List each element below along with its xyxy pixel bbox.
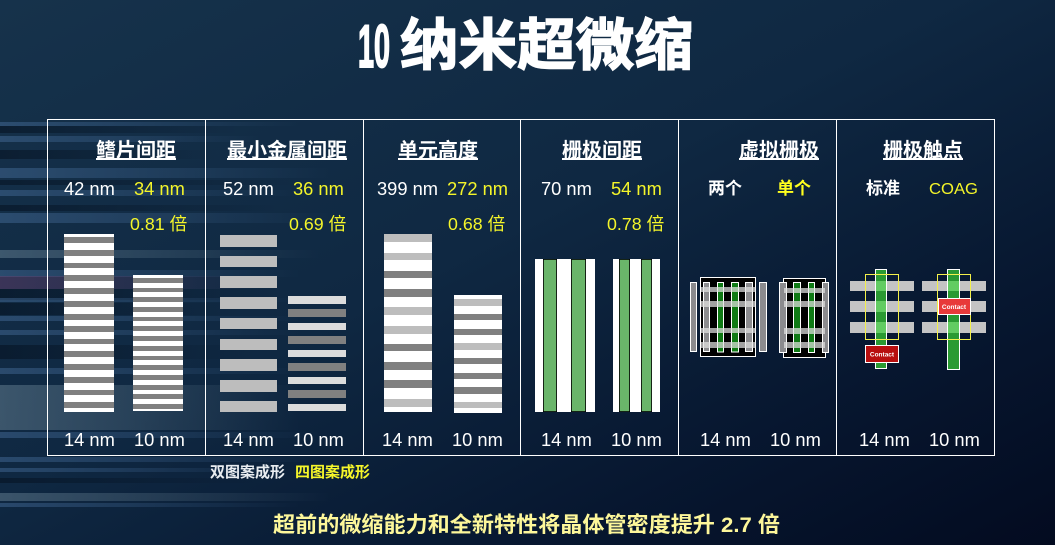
chart: 14 nm cell — [384, 234, 432, 412]
node labels: 10 nm — [452, 429, 503, 450]
heading: dummy gate: 虚拟栅极 — [739, 139, 819, 162]
values: cell height: 0.68 倍 — [448, 214, 506, 234]
node labels — [382, 429, 503, 450]
chart: 10 nm metal — [288, 296, 346, 411]
panel: gate pitch — [535, 139, 665, 450]
values: gate contact: 标准 — [866, 179, 900, 198]
node labels — [541, 429, 662, 450]
node labels: 14 nm — [382, 429, 433, 450]
chart: 14 nm contact — [850, 270, 914, 368]
panel: minimum metal pitch — [220, 138, 347, 450]
node labels: 10 nm — [770, 429, 821, 450]
heading: metal pitch: 最小金属间距 — [227, 138, 347, 162]
values: cell height: 272 nm — [447, 178, 508, 199]
values: dummy gate — [708, 179, 811, 198]
values: dummy gate: 单个 — [777, 179, 811, 198]
node labels: 10 nm — [293, 429, 344, 450]
panel: gate contact — [850, 139, 986, 450]
values: dummy gate: 两个 — [708, 179, 742, 198]
values: fin pitch: 34 nm — [134, 178, 185, 199]
panel: cell height — [377, 138, 508, 450]
node labels: 10 nm — [929, 429, 980, 450]
node labels — [223, 429, 344, 450]
values: cell height: 399 nm — [377, 178, 438, 199]
chart: 10 nm contact over active gate — [922, 270, 986, 370]
contact label: Contact — [870, 352, 895, 358]
values: cell height — [377, 178, 508, 234]
values: gate contact — [866, 179, 978, 198]
heading: cell height: 单元高度 — [398, 138, 478, 162]
node labels — [700, 429, 821, 450]
chart: 14 nm gates — [535, 259, 595, 412]
heading: gate pitch: 栅极间距 — [562, 139, 642, 162]
node labels: 10 nm — [611, 429, 662, 450]
chart: 14 nm metal — [220, 235, 277, 412]
heading: gate contact: 栅极触点 — [883, 139, 963, 162]
chart: 10 nm gates — [613, 259, 660, 412]
node labels — [64, 429, 185, 450]
values: gate contact: COAG — [929, 181, 978, 198]
values: gate pitch: 0.78 倍 — [607, 214, 665, 234]
values: gate pitch — [541, 178, 665, 234]
legend: patterning: 双图案成形 — [210, 463, 285, 481]
node labels — [859, 429, 980, 450]
values: fin pitch — [64, 178, 188, 234]
chart: 10 nm fins — [133, 275, 183, 411]
node labels: 10 nm — [134, 429, 185, 450]
node labels: 14 nm — [541, 429, 592, 450]
legend: patterning — [210, 463, 370, 481]
values: metal pitch: 52 nm — [223, 178, 274, 199]
node labels: 14 nm — [859, 429, 910, 450]
chart: 10 nm cell — [454, 295, 502, 413]
heading: fin pitch: 鳍片间距 — [96, 138, 176, 162]
legend: patterning: 四图案成形 — [295, 463, 370, 481]
chart: 14 nm fins — [64, 234, 114, 412]
node labels: 14 nm — [64, 429, 115, 450]
title: 纳米超微缩 — [400, 14, 693, 77]
panel: fin pitch — [64, 138, 188, 450]
values: gate pitch: 70 nm — [541, 178, 592, 199]
panel: dummy gate — [690, 139, 828, 450]
node labels: 14 nm — [223, 429, 274, 450]
values: fin pitch: 0.81 倍 — [130, 214, 188, 234]
comparison table frame — [48, 120, 994, 456]
chart: 10 nm single dummy gate — [780, 278, 828, 358]
chart: 14 nm dummy gate — [690, 278, 766, 356]
values: gate pitch: 54 nm — [611, 178, 662, 199]
title: 10 — [358, 13, 390, 80]
contact label: Contact — [942, 304, 967, 311]
conclusion text: 超前的微缩能力和全新特性将晶体管密度提升 2.7 倍 — [273, 512, 780, 537]
values: fin pitch: 42 nm — [64, 178, 115, 199]
node labels: 14 nm — [700, 429, 751, 450]
values: metal pitch: 36 nm — [293, 178, 344, 199]
values: metal pitch — [223, 178, 347, 234]
values: metal pitch: 0.69 倍 — [289, 214, 347, 234]
